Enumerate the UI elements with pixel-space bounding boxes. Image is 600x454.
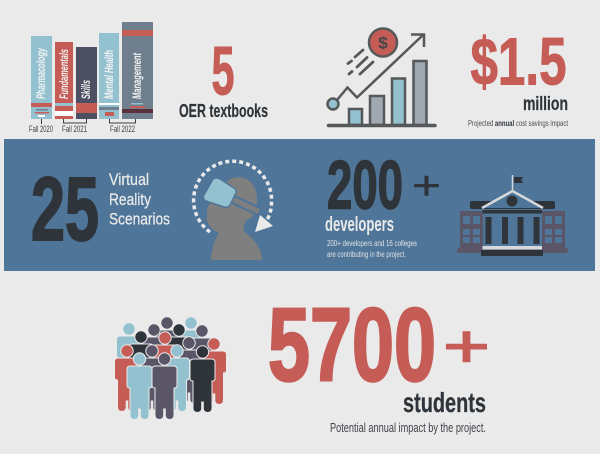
book: Management: Management bbox=[132, 52, 144, 99]
axis bbox=[328, 124, 435, 127]
goggles bbox=[203, 178, 236, 207]
bars bbox=[349, 61, 426, 125]
head silhouette bbox=[207, 177, 262, 260]
text: contributors note: 200+ developers and 16 colleges bbox=[327, 239, 417, 248]
stat: 5: 5 bbox=[212, 32, 234, 110]
panel: blue band bbox=[4, 139, 595, 271]
icon: growth chart with coin bbox=[328, 28, 435, 126]
heading: Virtual Reality Scenarios: Virtual bbox=[109, 170, 149, 189]
caption: students: students bbox=[403, 387, 486, 418]
label: Fall 2022: Fall 2022 bbox=[110, 124, 135, 134]
caption: developers: developers bbox=[325, 214, 394, 236]
heading: Virtual Reality Scenarios: Scenarios bbox=[109, 210, 170, 228]
columns bbox=[486, 217, 540, 244]
book: Skills: Skills bbox=[81, 80, 93, 99]
heading: Virtual Reality Scenarios bbox=[109, 170, 170, 228]
timeline brackets bbox=[42, 119, 136, 124]
text: contributors note: are contributing in the project. bbox=[327, 250, 406, 259]
heading: Virtual Reality Scenarios: Reality bbox=[109, 190, 151, 209]
flag bbox=[512, 175, 514, 192]
trend arrow bbox=[337, 34, 424, 100]
book: Pharmacology: Pharmacology bbox=[36, 48, 48, 99]
caption: potential annual impact: Potential annual impact by the project. bbox=[330, 420, 486, 435]
label: Fall 2020: Fall 2020 bbox=[29, 124, 53, 134]
wings bbox=[457, 211, 568, 253]
rotation arrow bbox=[194, 161, 272, 232]
stat: plus sign: + bbox=[443, 313, 490, 380]
stat: 25: 25 bbox=[31, 160, 99, 260]
steps bbox=[482, 246, 542, 250]
caption: million: million bbox=[523, 94, 568, 115]
caption: OER textbooks: OER textbooks bbox=[179, 101, 268, 121]
roof bbox=[470, 201, 555, 209]
stat: 5700: 5700 bbox=[268, 288, 436, 404]
entablature bbox=[482, 210, 542, 214]
windows bbox=[463, 216, 562, 243]
caption: projected savings: Projected annual cost savings impact bbox=[468, 119, 569, 128]
stat: $1.5: $1.5 bbox=[470, 24, 566, 100]
book: Fundamentals: Fundamentals bbox=[59, 49, 71, 99]
icon: crowd of people bbox=[114, 317, 226, 420]
icon: VR headset head bbox=[194, 161, 273, 260]
stat: 200: 200 bbox=[327, 146, 403, 224]
icon: college building bbox=[457, 175, 568, 256]
book: Mental Health: Mental Health bbox=[104, 50, 116, 99]
headset strap bbox=[232, 199, 258, 211]
pediment bbox=[482, 191, 543, 208]
stat: plus sign: + bbox=[412, 164, 441, 208]
icon: textbooks bbox=[31, 22, 153, 119]
coin: $ bbox=[378, 34, 388, 52]
text: contributors note bbox=[327, 239, 417, 259]
speed dashes bbox=[348, 50, 373, 74]
label: Fall 2021: Fall 2021 bbox=[62, 124, 87, 134]
